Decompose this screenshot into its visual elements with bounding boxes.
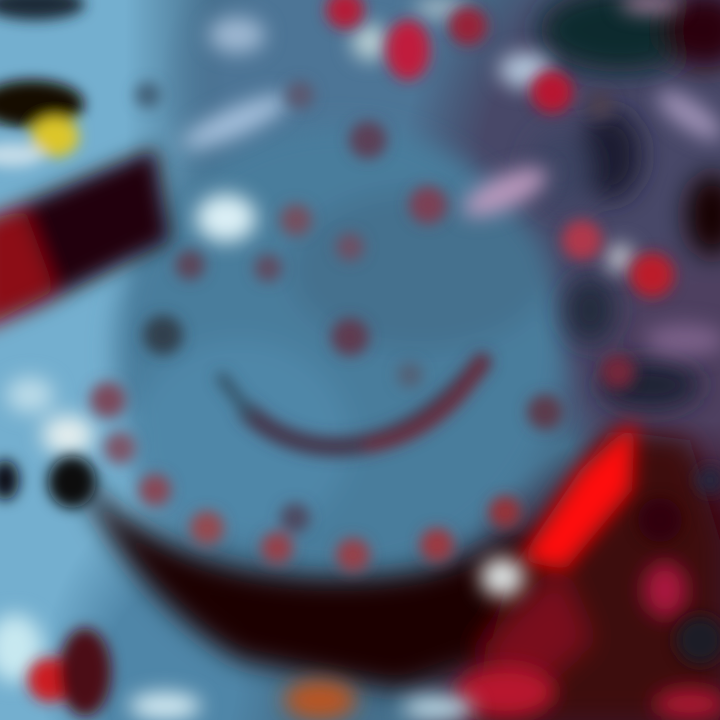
smile arc [222, 362, 482, 447]
virus body [115, 125, 565, 575]
dark red lower mass [75, 430, 720, 720]
bright red streak [284, 420, 720, 720]
left dark red block [0, 148, 170, 330]
dark rim shadows [530, 110, 700, 409]
top-right dark shapes [540, 0, 720, 257]
top-left dark capsule with yellow [0, 0, 85, 167]
